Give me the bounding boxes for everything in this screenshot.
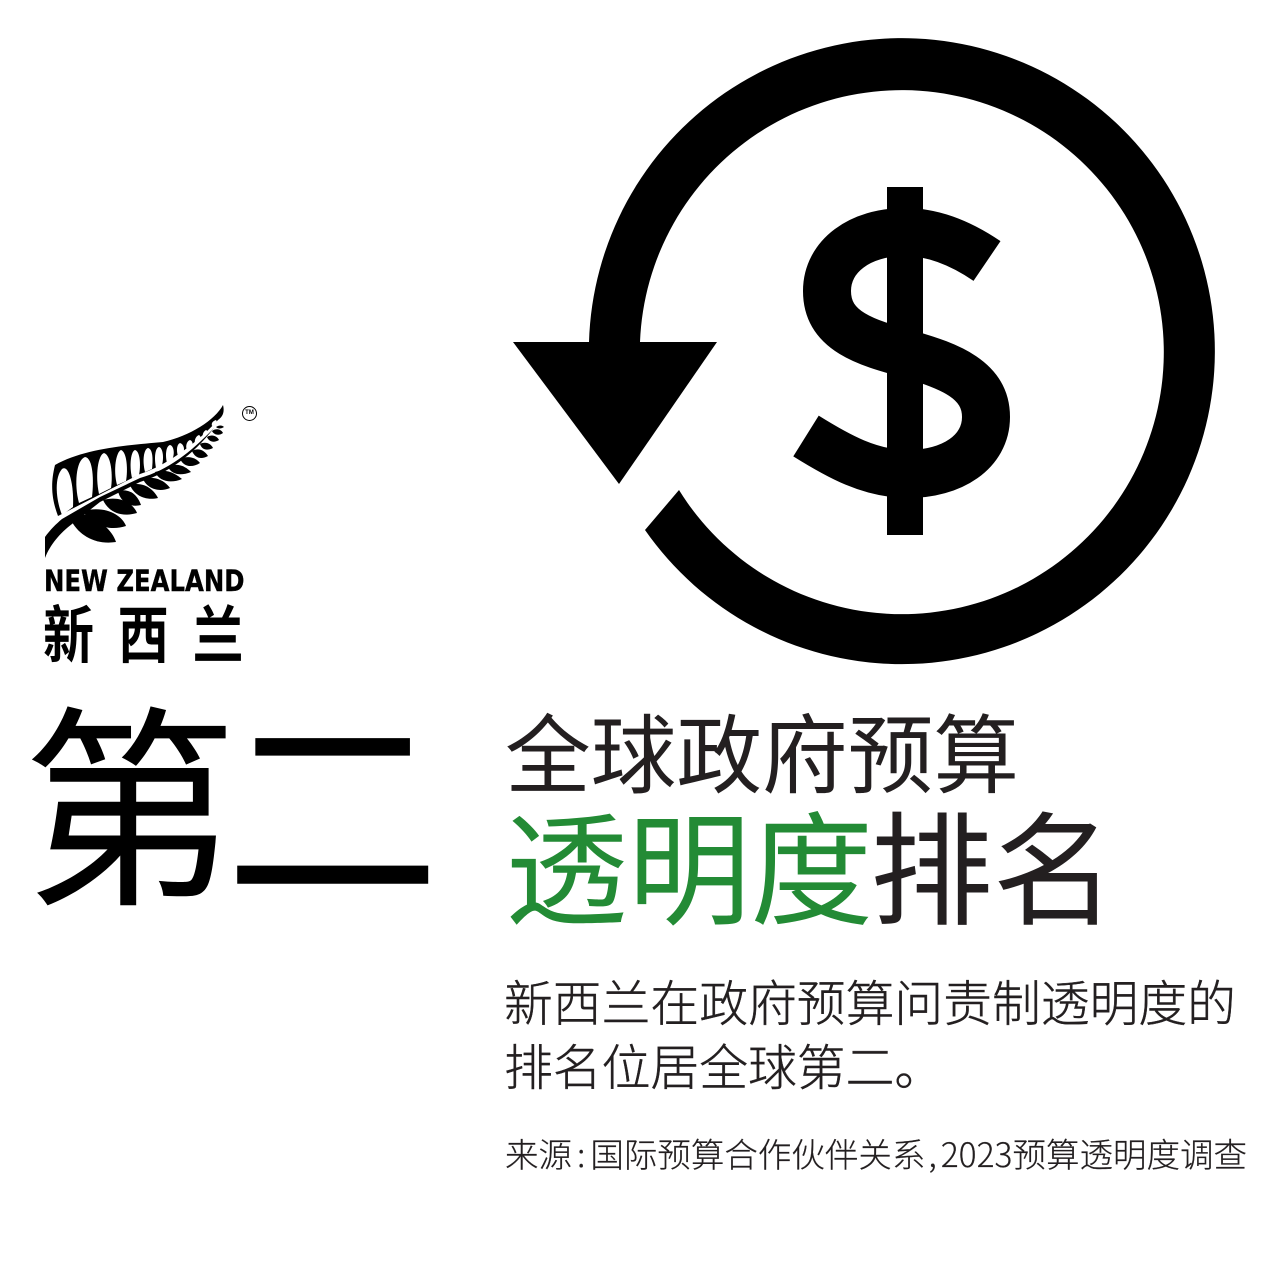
dollar sign curve — [806, 232, 987, 474]
circular arrow ring — [589, 38, 1215, 664]
arrow head — [513, 342, 717, 484]
description text — [504, 965, 1236, 1100]
big number: second: 第二 — [22, 639, 428, 950]
trademark symbol — [242, 406, 257, 421]
dollar sign bar — [887, 187, 923, 535]
logo text: New Zealand: NEW ZEALAND — [44, 564, 244, 598]
icon: silver fern — [45, 405, 224, 558]
description text: 新西兰在政府预算问责制透明度的 — [504, 965, 1236, 1036]
trademark symbol: TM — [245, 410, 254, 416]
description text: 排名位居全球第二。 — [504, 1029, 943, 1100]
logo text: Chinese name: 新西兰 — [43, 585, 267, 676]
source note: 来源:国际预算合作伙伴关系,2023预算透明度调查 — [505, 1128, 1247, 1177]
heading line 2: 透明度排名 — [505, 774, 1115, 951]
heading line 1: 全球政府预算 — [505, 687, 1019, 811]
logo: New Zealand fern mark — [43, 405, 267, 676]
